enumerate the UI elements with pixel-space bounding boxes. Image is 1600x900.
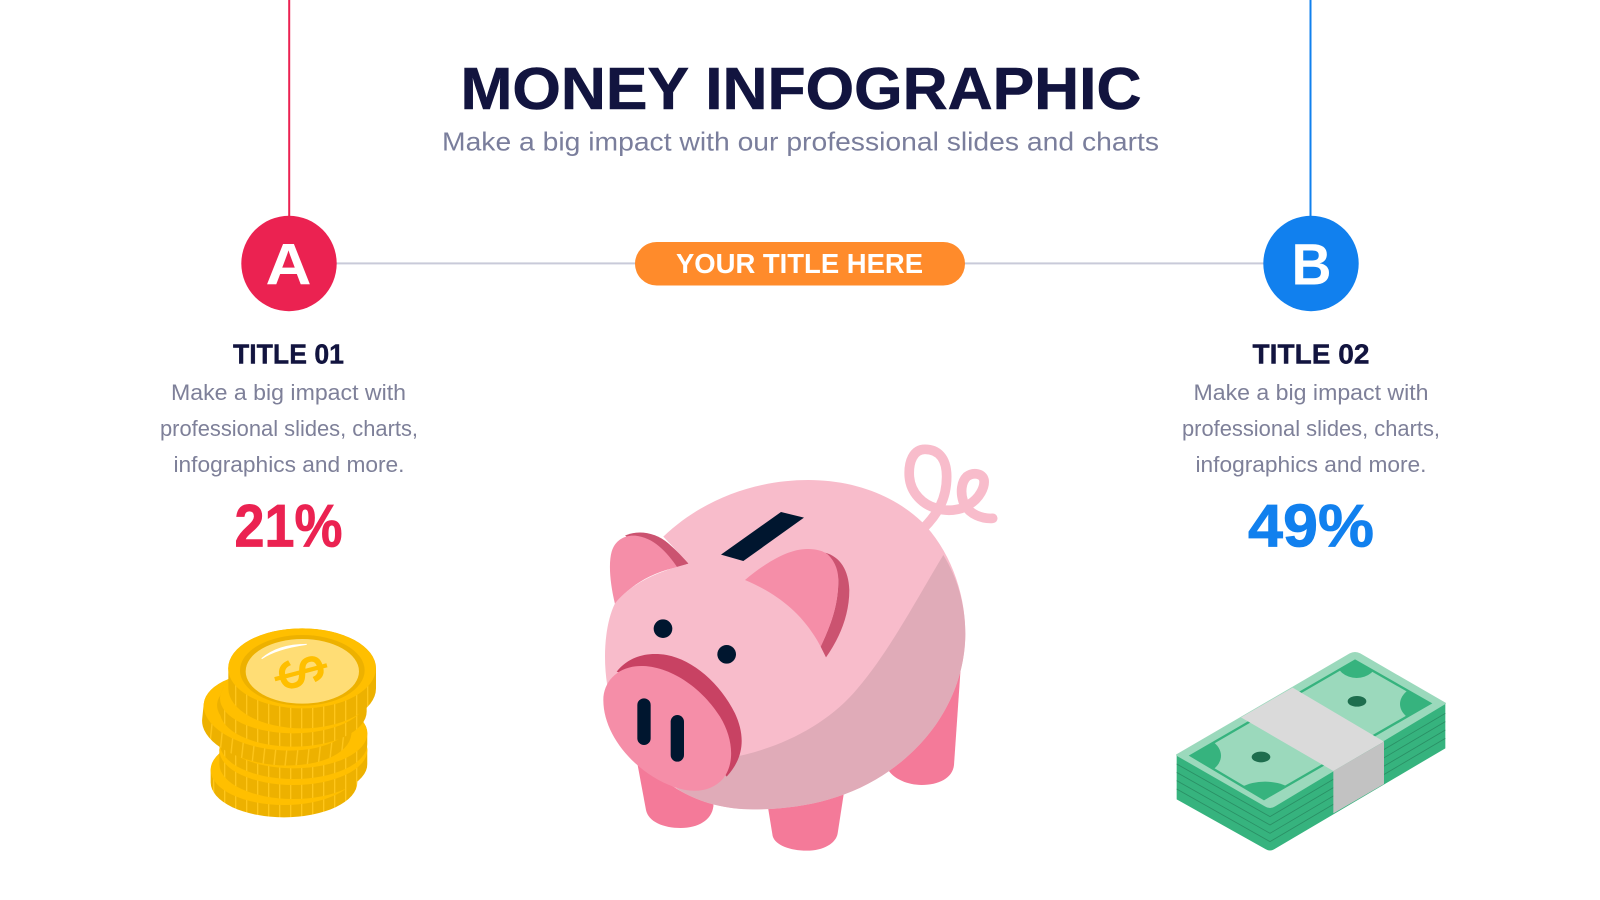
badge B: B [1292, 232, 1332, 298]
title: MONEY INFOGRAPHIC [460, 55, 1142, 122]
pig legs [637, 663, 961, 851]
panel: left column A [160, 0, 418, 560]
nostrils [644, 705, 677, 755]
coin 2 [219, 715, 367, 799]
dollar sign: $ [262, 649, 339, 695]
blue vertical line [1310, 0, 1312, 218]
stack sides [1177, 703, 1445, 850]
pig tail [909, 449, 993, 528]
badge B [1263, 216, 1359, 311]
heading: title 02: TITLE 02 [1252, 338, 1370, 369]
body shadow [677, 555, 965, 809]
top coin [228, 628, 376, 728]
body text right [1182, 380, 1440, 477]
coin 5 [220, 663, 367, 747]
pill: your title here [635, 242, 965, 286]
coin 3 [220, 698, 367, 779]
snout [603, 654, 742, 791]
subtitle: Make a big impact with our professional slides and charts [442, 126, 1159, 156]
body text right: Make a big impact with [1194, 380, 1428, 405]
badge A [241, 216, 337, 311]
top note [1177, 653, 1445, 807]
left ear [610, 533, 689, 604]
icon: piggy bank [603, 449, 993, 851]
paper band [1241, 688, 1384, 813]
coin slot [721, 512, 804, 561]
stat 49%: 49% [1248, 492, 1374, 560]
icon: banknote bundle [1176, 652, 1446, 850]
badge A: A [266, 232, 312, 298]
coin 4 tilted [198, 666, 357, 773]
panel: right column B [1182, 0, 1440, 560]
note print [1188, 660, 1432, 800]
right ear [745, 549, 849, 657]
body text right: infographics and more. [1196, 452, 1426, 477]
body text right: professional slides, charts, [1182, 416, 1440, 441]
icon: coin stack [198, 628, 376, 817]
pig body [605, 480, 965, 809]
pill: your title here: YOUR TITLE HERE [676, 248, 923, 279]
red vertical line [288, 0, 290, 218]
coin 1 [211, 735, 357, 817]
coin highlight [262, 644, 307, 659]
body text left [160, 380, 418, 477]
body text left: Make a big impact with [171, 380, 406, 405]
body text left: infographics and more. [174, 452, 404, 477]
body text left: professional slides, charts, [160, 416, 418, 441]
heading: title 01: TITLE 01 [233, 338, 344, 369]
stat 21%: 21% [234, 492, 342, 560]
pig eyes [654, 619, 736, 664]
paper layer lines [1177, 713, 1445, 842]
connector line between badges [336, 262, 1264, 264]
